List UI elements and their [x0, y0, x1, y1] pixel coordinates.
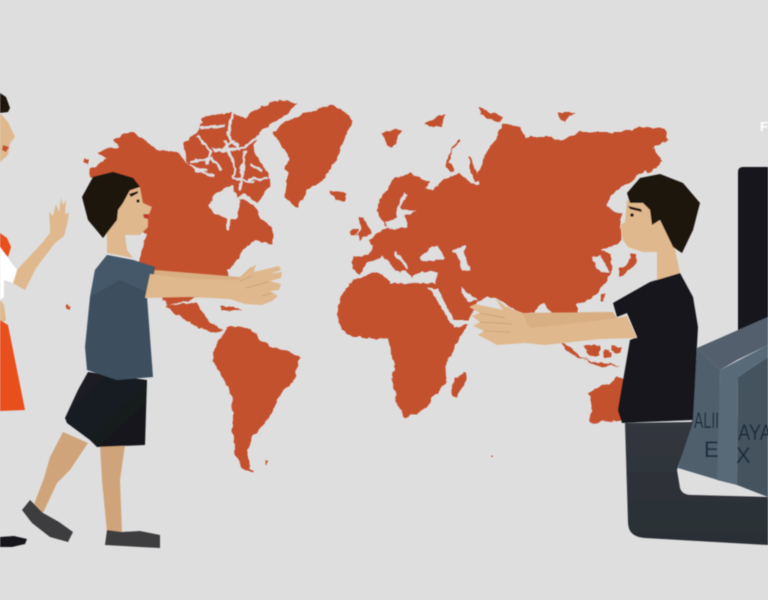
map: Iceland	[330, 191, 347, 201]
box: left face	[678, 348, 720, 480]
boy: shirt highlight	[90, 255, 155, 297]
map: North America	[84, 132, 273, 333]
woman: waist skin	[0, 300, 6, 325]
man: arm shadow	[522, 312, 617, 328]
map: Australia	[588, 377, 630, 423]
map: Greenland	[273, 105, 353, 208]
corner text fragment: F	[760, 119, 768, 134]
man: shirt	[613, 273, 698, 423]
boy: back shoe	[22, 500, 73, 542]
map: Madagascar	[452, 372, 467, 397]
box: top face	[697, 317, 768, 370]
box: label text: E	[704, 437, 719, 462]
box: label text: X	[736, 443, 751, 468]
man: trousers	[625, 422, 768, 545]
woman: face	[0, 113, 15, 162]
boy: hair	[82, 172, 140, 238]
man: finger lines	[480, 313, 512, 332]
box: right face	[737, 357, 768, 497]
boy	[22, 172, 282, 548]
map: South America	[213, 327, 300, 473]
man: eye and brow	[628, 206, 642, 212]
box: dark upright panel	[738, 167, 768, 330]
map: Taiwan	[601, 293, 605, 300]
map: northern Asian islands	[382, 107, 577, 182]
boy: back leg	[33, 432, 88, 513]
map: small islands	[65, 304, 493, 465]
woman at left	[0, 93, 69, 547]
map: Adriatic sea	[394, 251, 408, 268]
boy: neck and face	[100, 187, 152, 258]
boy: eye and brow	[129, 191, 138, 197]
boy: front arm and hands	[145, 264, 282, 305]
boy: finger lines	[240, 276, 272, 296]
woman: mouth	[2, 145, 9, 152]
man: hair	[627, 174, 700, 253]
man: neck and face	[620, 200, 680, 280]
box: corner strip	[717, 345, 768, 485]
woman: hair	[0, 93, 10, 113]
woman: dress top	[0, 233, 11, 257]
man with box	[469, 167, 768, 545]
world map	[65, 100, 668, 473]
boy: shirt	[85, 255, 155, 380]
map: Eurasia	[352, 123, 668, 320]
map: Japan	[618, 252, 637, 277]
map: Africa	[337, 272, 468, 418]
boy: back arm	[150, 266, 254, 296]
woman: white sleeve	[0, 247, 17, 300]
man: arms and hands	[469, 298, 637, 345]
map: Arctic islands	[183, 100, 298, 203]
map: Southeast Asia islands	[562, 342, 622, 367]
boy: shorts	[65, 372, 147, 447]
woman: shoe	[0, 536, 27, 547]
map: inland seas	[360, 170, 649, 326]
woman: skirt	[0, 320, 25, 411]
boy: front leg	[100, 445, 125, 532]
boy: mouth	[143, 214, 149, 219]
boy: front shoe	[105, 530, 160, 548]
box: label text	[694, 408, 768, 468]
box: label text: ALII	[694, 408, 719, 433]
map: British Isles	[350, 218, 372, 240]
woman: raised arm and hand	[13, 198, 69, 290]
